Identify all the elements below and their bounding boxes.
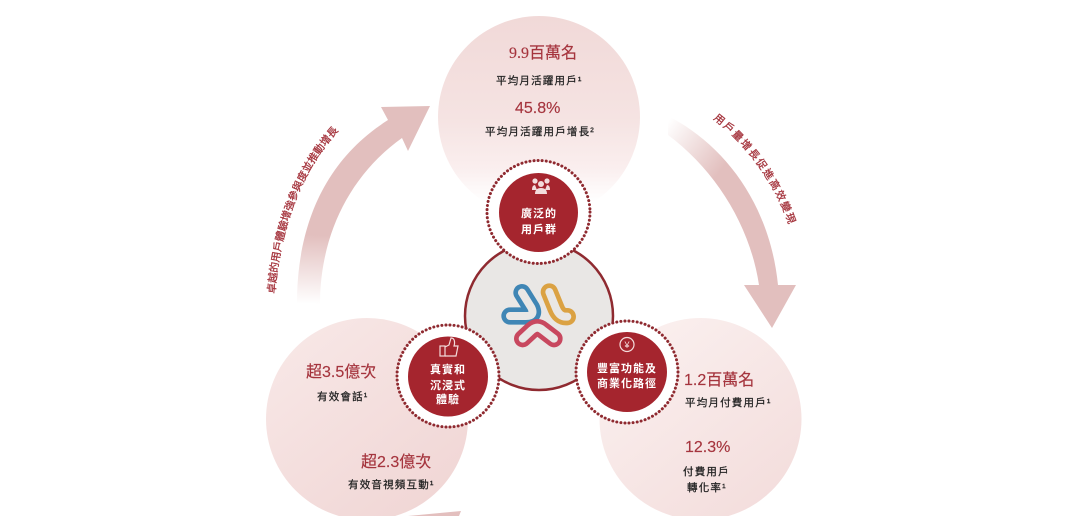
panel: monetization circle (600, 318, 802, 516)
badge: broad user base: 廣泛的 (521, 206, 557, 220)
badge: immersive experience: 真實和 (430, 362, 466, 376)
stat: sessions: 超3.5億次 (306, 363, 376, 381)
stat: conversion rate: 12.3% (685, 439, 730, 456)
label: MAU growth: 平均月活躍用戶增長² (485, 125, 595, 138)
center circle with logo (465, 242, 613, 390)
icon: people (532, 178, 550, 194)
label: monthly active users: 平均月活躍用戶¹ (496, 75, 583, 87)
stat: paying users: 1.2百萬名 (684, 371, 754, 389)
arrow: experience to users (297, 106, 430, 304)
label: conversion rate line two: 轉化率¹ (687, 481, 727, 494)
badge: broad user base (487, 160, 590, 264)
curved text: right arrow: 用戶量增長促進高效變現 (712, 113, 796, 224)
label: paying users: 平均月付費用戶¹ (685, 396, 772, 409)
badge: immersive experience: 體驗 (436, 392, 460, 406)
arrow: bottom fragment (408, 511, 461, 516)
stat: interactions: 超2.3億次 (361, 453, 431, 471)
stat: monthly active users: 9.9百萬名 (509, 44, 577, 62)
icon: yen cycle: ¥ (623, 340, 630, 350)
badge: rich features and monetization: 商業化路徑 (597, 376, 657, 390)
badge: immersive experience: 沉浸式 (430, 378, 466, 392)
badge: rich features and monetization (576, 321, 678, 423)
panel: users circle (438, 16, 640, 218)
label: conversion rate: 付費用戶 (683, 465, 730, 478)
label: interactions: 有效音視頻互動¹ (348, 478, 435, 491)
badge: broad user base: 用戶群 (521, 222, 557, 236)
panel: experience circle (266, 318, 468, 516)
logo (510, 292, 567, 339)
badge: rich features and monetization: 豐富功能及 (597, 361, 657, 375)
label: sessions: 有效會話¹ (317, 390, 368, 403)
arrow: users to monetization (668, 116, 796, 328)
icon: thumbs up (440, 338, 458, 356)
stat: MAU growth: 45.8% (515, 100, 560, 117)
badge: immersive experience (397, 325, 499, 427)
curved text: left arrow: 卓越的用戶體驗增強參與度並推動增長 (266, 126, 339, 294)
